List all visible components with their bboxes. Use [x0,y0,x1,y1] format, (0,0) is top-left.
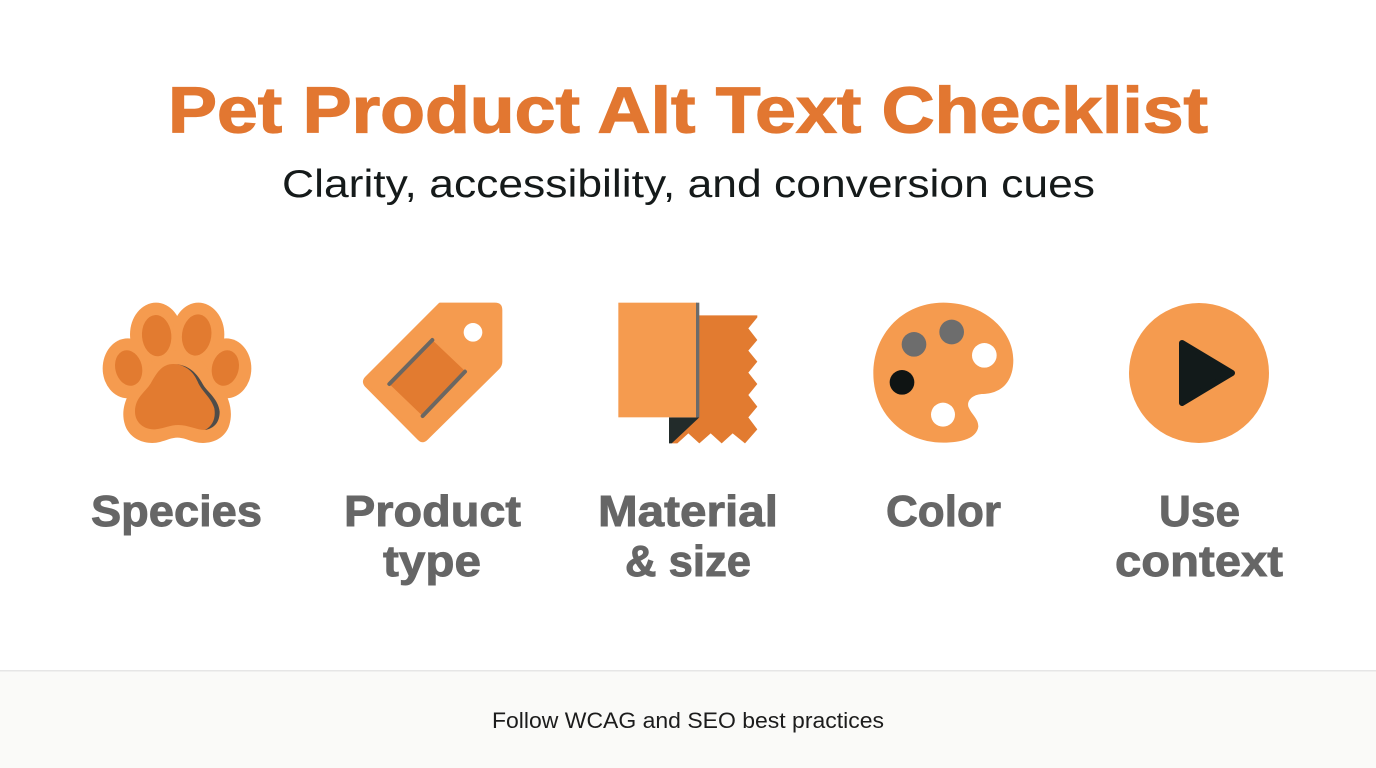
label: product type: type [383,537,481,586]
label: species: Species [91,487,262,536]
icon: fabric swatches [618,303,757,443]
icon: price tag [365,304,501,440]
label: material and size [598,487,778,586]
title: Pet Product Alt Text Checklist [168,74,1208,146]
icon: play button [1129,303,1269,443]
subtitle: Clarity, accessibility, and conversion cues [282,163,1095,206]
checklist item: product type [344,304,521,586]
checklist item: use context [1115,303,1283,586]
icon: paw print [103,303,251,443]
footer note: Follow WCAG and SEO best practices [492,708,884,733]
checklist item: color [873,303,1013,536]
label: use context: Use [1159,487,1240,536]
label: use context [1115,487,1283,586]
label: product type [344,487,521,586]
label: product type: Product [344,487,521,536]
label: material and size: & size [625,537,751,586]
label: use context: context [1115,537,1283,586]
icon: paint palette [873,303,1013,443]
checklist item: material and size [598,303,778,586]
checklist item: species [91,303,262,536]
label: color: Color [886,487,1001,536]
footer bar [0,670,1376,768]
label: material and size: Material [598,487,778,536]
